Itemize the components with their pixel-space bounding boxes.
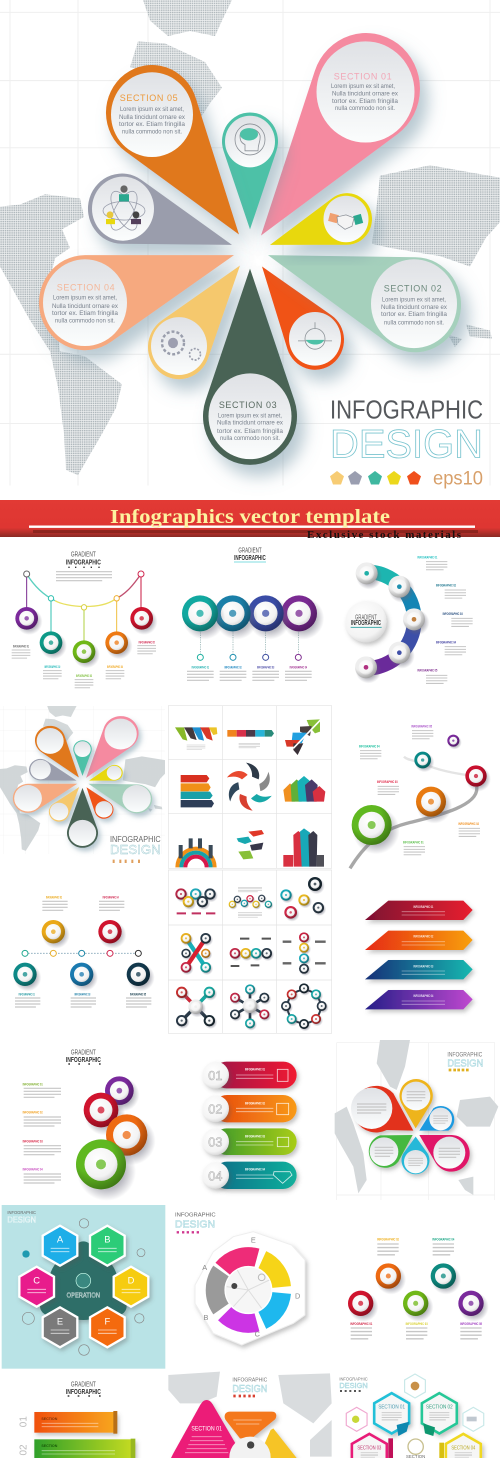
pentagon colour swatches and eps10: eps10: [433, 468, 483, 490]
petal: red orange drone: [262, 267, 344, 370]
cell: six-arm hub: [230, 984, 271, 1031]
cell: four-arm star: [176, 987, 217, 1029]
thumbnail: five spheres: [348, 1237, 489, 1339]
thumbnail: five spheres: INFOGRAPHIC 01: [350, 1321, 373, 1326]
petal: teal brain: [222, 112, 278, 229]
section 02 text: tortor ex. Etiam fringilla: [381, 311, 447, 318]
petal: pink section 01: [261, 33, 420, 236]
thumbnail: four arrow banners: INFOGRAPHIC 01: [413, 904, 434, 909]
cell: ring column: [283, 932, 326, 976]
thumbnail: timeline with pins: INFOGRAPHIC 04: [103, 895, 119, 900]
cell: cross of rings: [181, 933, 213, 975]
thumbnail: outlined hexagons: SECTION 01: [378, 1404, 405, 1410]
thumbnail: hanging circles: INFOGRAPHIC 04: [107, 664, 123, 669]
thumbnail: hexagon operation on pale blue: OPERATION: [67, 1292, 100, 1299]
thumbnail: overlapping spheres: GRADIENT: [71, 1050, 96, 1057]
cell: up arrows: [283, 828, 324, 867]
thumbnail: hanging circles: INFOGRAPHIC: [66, 558, 101, 567]
thumbnail: segmented ring with flaps: A: [202, 1263, 207, 1272]
thumbnail: outlined hexagons: SECTION 03: [357, 1445, 381, 1451]
thumbnail: hanging circles: [12, 552, 158, 688]
icon: handshake: [328, 213, 363, 229]
thumbnail: arc with sphere: INFOGRAPHIC 02: [436, 583, 456, 588]
thumbnail: mini petal infographic: DESIGN: [110, 843, 161, 857]
thumbnail: numbered pills: INFOGRAPHIC 03: [245, 1133, 265, 1138]
panel: main petal infographic: [0, 0, 500, 490]
cell: ring chain: [175, 888, 218, 913]
thumbnail: four arrow banners: INFOGRAPHIC 04: [413, 993, 434, 998]
thumbnail: hexagon operation on pale blue: E: [57, 1316, 63, 1326]
thumbnail: segmented ring with flaps: C: [255, 1330, 261, 1339]
thumbnail: hexagon operation on pale blue: A: [57, 1235, 64, 1245]
cell: house arrows: [283, 776, 325, 802]
thumbnail: triangle petals on map: SECTION 01: [191, 1426, 222, 1433]
thumbnail: map with red petals: INFOGRAPHIC: [447, 1053, 483, 1059]
section 03 text: SECTION 03: [219, 400, 277, 410]
thumbnail: mini petal infographic: [0, 706, 165, 861]
thumbnail: gradient ribbons: [19, 1382, 135, 1458]
thumbnail: segmented ring with flaps: DESIGN: [175, 1219, 215, 1230]
icon: brain head: [235, 124, 265, 155]
cell: stacked ribbons: [181, 775, 214, 807]
icon: people atom: [103, 185, 145, 234]
section 01 text: Nulla tincidunt ornare ex: [332, 90, 399, 98]
thumbnail: arc with sphere: INFOGRAPHIC 03: [443, 611, 463, 616]
section 05 text: SECTION 05: [120, 93, 178, 103]
section 02 text: SECTION 02: [384, 283, 442, 293]
cell: small ring row: [229, 887, 273, 917]
thumbnail: outlined hexagons: DESIGN: [339, 1383, 368, 1390]
thumbnail: numbered pills: [202, 1062, 297, 1189]
heading: infographic design: DESIGN: [330, 422, 483, 467]
section 05 text: nulla commodo non sit.: [122, 128, 182, 135]
cell: rainbow arches: [177, 838, 215, 867]
banner title: Infographics vector template: [110, 506, 390, 528]
section 04 text: [52, 282, 119, 324]
thumbnail: numbered pills: 02: [208, 1103, 222, 1117]
thumbnail: outlined hexagons: INFOGRAPHIC: [339, 1377, 368, 1383]
section 01 text: SECTION 01: [334, 71, 392, 82]
section 03 text: tortor ex. Etiam fringilla: [217, 428, 283, 435]
section 05 text: [119, 93, 186, 135]
thumbnail: timeline with pins: INFOGRAPHIC 05: [130, 991, 146, 996]
cell: slanted arrows: [175, 727, 217, 749]
thumbnail: arc with sphere: INFOGRAPHIC 04: [436, 639, 456, 644]
thumbnail: four arrow banners: [365, 901, 473, 1009]
thumbnail: four arrow banners: INFOGRAPHIC 03: [413, 963, 434, 968]
cell: eight ring circle: [281, 983, 329, 1031]
pentagon colour swatches and eps10: [330, 468, 483, 490]
section 03 text: [217, 400, 284, 442]
thumbnail: hanging circles: GRADIENT: [71, 552, 96, 559]
petal: dark green section 03: [203, 269, 297, 465]
thumbnail: hexagon operation on pale blue: C: [33, 1276, 40, 1286]
section 01 text: nulla commodo non sit.: [335, 105, 395, 112]
section 04 text: tortor ex. Etiam fringilla: [52, 310, 118, 317]
cell: swirl of arrows: [224, 763, 275, 811]
thumbnail: four linked rings: INFOGRAPHIC 02: [224, 664, 242, 669]
thumbnail: hexagon operation on pale blue: DESIGN: [7, 1216, 36, 1225]
thumbnail: five spheres: INFOGRAPHIC 04: [432, 1237, 455, 1242]
section 05 text: tortor ex. Etiam fringilla: [119, 121, 185, 128]
cell: scattered rings: [280, 877, 326, 922]
thumbnail: gradient ribbons: 01: [19, 1416, 30, 1427]
thumbnail: segmented ring with flaps: E: [251, 1236, 256, 1245]
icon: drone: [298, 322, 332, 349]
thumbnail: arc with sphere: INFOGRAPHIC 05: [417, 668, 438, 673]
section 03 text: nulla commodo non sit.: [220, 435, 280, 442]
thumbnail: outlined hexagons: [339, 1373, 484, 1458]
icon: gears: [162, 332, 200, 360]
thumbnail: segmented ring with flaps: B: [204, 1313, 209, 1322]
petal: orange section 05: [106, 65, 239, 234]
thumbnail: 3x3 ring collection: [168, 870, 332, 1033]
section 05 text: Nulla tincidunt ornare ex: [119, 114, 186, 121]
thumbnail: numbered pills: INFOGRAPHIC 04: [245, 1167, 265, 1172]
section 02 text: [381, 283, 448, 326]
section 04 text: nulla commodo non sit.: [55, 317, 115, 324]
thumbnail: map with red petals: DESIGN: [447, 1059, 483, 1070]
thumbnail: five spheres: INFOGRAPHIC 05: [460, 1321, 483, 1326]
thumbnails rows 5 and 6: [2, 1205, 489, 1458]
petal: yellow handshake: [270, 193, 372, 245]
thumbnail: four linked rings: GRADIENT: [238, 548, 262, 555]
thumbnail: gradient ribbons: INFOGRAPHIC: [66, 1387, 101, 1396]
thumbnail: hexagon operation on pale blue: F: [104, 1316, 110, 1326]
thumbnail: overlapping spheres: INFOGRAPHIC 04: [23, 1167, 43, 1172]
thumbnails rows 3 and 4: [13, 870, 498, 1201]
thumbnail: gradient ribbons: SECTION: [41, 1443, 57, 1448]
thumbnails rows 1 and 2: [0, 548, 491, 868]
banner: [0, 500, 500, 541]
thumbnail: triangle petals on map: [168, 1372, 332, 1458]
banner subtitle: Exclusive stock materials: [307, 529, 462, 541]
thumbnail: gradient ribbons: 02: [19, 1444, 30, 1456]
thumbnail: winding road: [350, 723, 491, 868]
thumbnail: winding road: INFOGRAPHIC 03: [377, 779, 398, 784]
thumbnail: segmented ring with flaps: [175, 1213, 305, 1345]
petal: grey people: [88, 174, 232, 245]
thumbnail: timeline with pins: [13, 895, 155, 1007]
thumbnail: numbered pills: 04: [208, 1169, 222, 1183]
thumbnail: gradient ribbons: GRADIENT: [71, 1382, 96, 1389]
thumbnail: four arrow banners: INFOGRAPHIC 02: [413, 934, 434, 939]
thumbnail: hexagon operation on pale blue: INFOGRAPHIC: [7, 1210, 36, 1216]
thumbnail: numbered pills: INFOGRAPHIC 01: [245, 1067, 265, 1072]
thumbnail: outlined hexagons: SECTION 02: [426, 1404, 453, 1410]
thumbnail: arc with sphere: INFOGRAPHIC: [351, 618, 381, 627]
thumbnail: four linked rings: INFOGRAPHIC 04: [290, 664, 307, 669]
thumbnail: overlapping spheres: INFOGRAPHIC 03: [23, 1138, 43, 1143]
section 01 text: Lorem ipsum ex sit amet,: [331, 83, 395, 90]
petal: salmon section 04: [39, 255, 234, 350]
petal: mint section 02: [268, 255, 461, 352]
thumbnail: winding road: INFOGRAPHIC 05: [411, 723, 432, 728]
heading: infographic design: [330, 396, 483, 467]
cell: chevron row: [227, 730, 274, 748]
thumbnail: overlapping spheres: INFOGRAPHIC: [66, 1055, 101, 1064]
thumbnail: gradient ribbons: SECTION: [41, 1416, 57, 1421]
thumbnail: winding road: INFOGRAPHIC 02: [458, 821, 479, 826]
thumbnail: timeline with pins: INFOGRAPHIC 01: [19, 991, 35, 996]
section 04 text: Nulla tincidunt ornare ex: [52, 303, 119, 310]
thumbnail: 3x3 arrow collection: [168, 706, 332, 868]
thumbnail: overlapping spheres: [23, 1050, 156, 1201]
thumbnail: hexagon operation on pale blue: [2, 1205, 165, 1369]
thumbnail: timeline with pins: INFOGRAPHIC 03: [74, 991, 91, 996]
petal: ochre gears: [148, 265, 240, 379]
thumbnail: numbered pills: 01: [208, 1069, 222, 1083]
section 02 text: Nulla tincidunt ornare ex: [381, 304, 448, 311]
thumbnail: five spheres: INFOGRAPHIC 03: [406, 1321, 428, 1326]
thumbnail: arc with sphere: GRADIENT: [355, 614, 377, 621]
thumbnail: hanging circles: INFOGRAPHIC 03: [76, 673, 92, 678]
thumbnail: hanging circles: INFOGRAPHIC 02: [44, 664, 61, 669]
thumbnail: hexagon operation on pale blue: D: [128, 1276, 135, 1286]
thumbnail: hanging circles: INFOGRAPHIC 01: [13, 644, 29, 649]
thumbnail: timeline with pins: INFOGRAPHIC 02: [46, 895, 62, 900]
cell: arrows pair: [237, 830, 264, 859]
thumbnail: numbered pills: INFOGRAPHIC 02: [245, 1100, 265, 1105]
thumbnail: segmented ring with flaps: INFOGRAPHIC: [175, 1213, 216, 1219]
section 04 text: Lorem ipsum ex sit amet,: [53, 294, 117, 302]
thumbnail: four linked rings: INFOGRAPHIC 01: [192, 664, 209, 669]
section 01 text: [331, 71, 399, 112]
thumbnail: triangle petals on map: INFOGRAPHIC: [232, 1378, 267, 1384]
thumbnail: map with red petals: [335, 1040, 498, 1200]
thumbnail: hanging circles: INFOGRAPHIC 05: [139, 640, 155, 645]
thumbnail: winding road: INFOGRAPHIC 01: [403, 840, 424, 845]
thumbnail: hexagon operation on pale blue: B: [104, 1235, 110, 1245]
thumbnail: five spheres: INFOGRAPHIC 02: [377, 1237, 400, 1242]
thumbnail: winding road: INFOGRAPHIC 04: [359, 743, 380, 748]
section 03 text: Lorem ipsum ex sit amet,: [218, 412, 282, 419]
section 04 text: SECTION 04: [57, 282, 115, 292]
section 05 text: Lorem ipsum ex sit amet,: [120, 106, 184, 113]
section 02 text: nulla commodo non sit.: [384, 319, 444, 326]
thumbnail: mini petal infographic: INFOGRAPHIC: [110, 835, 161, 844]
section 02 text: Lorem ipsum ex sit amet,: [382, 297, 446, 304]
thumbnail: overlapping spheres: INFOGRAPHIC 01: [23, 1081, 43, 1086]
thumbnail: numbered pills: 03: [208, 1136, 222, 1150]
thumbnail: arc with sphere: INFOGRAPHIC 01: [417, 554, 438, 559]
heading: infographic design: INFOGRAPHIC: [330, 396, 483, 424]
thumbnail: four linked rings: [182, 548, 324, 680]
thumbnail: outlined hexagons: SECTION 04: [451, 1445, 475, 1451]
thumbnail: overlapping spheres: INFOGRAPHIC 02: [23, 1110, 43, 1115]
world map and grid backdrop: [0, 0, 500, 486]
thumbnail: four linked rings: INFOGRAPHIC: [234, 553, 266, 562]
section 03 text: Nulla tincidunt ornare ex: [217, 419, 284, 427]
thumbnail: arc with sphere: [345, 554, 473, 683]
section 01 text: tortor ex. Etiam fringilla: [332, 98, 398, 105]
cell: ring row: [230, 939, 274, 966]
cell: arrow tree: [285, 719, 322, 755]
thumbnail: triangle petals on map: DESIGN: [232, 1384, 267, 1395]
thumbnail: segmented ring with flaps: D: [295, 1291, 300, 1300]
thumbnail: four linked rings: INFOGRAPHIC 03: [257, 664, 275, 669]
